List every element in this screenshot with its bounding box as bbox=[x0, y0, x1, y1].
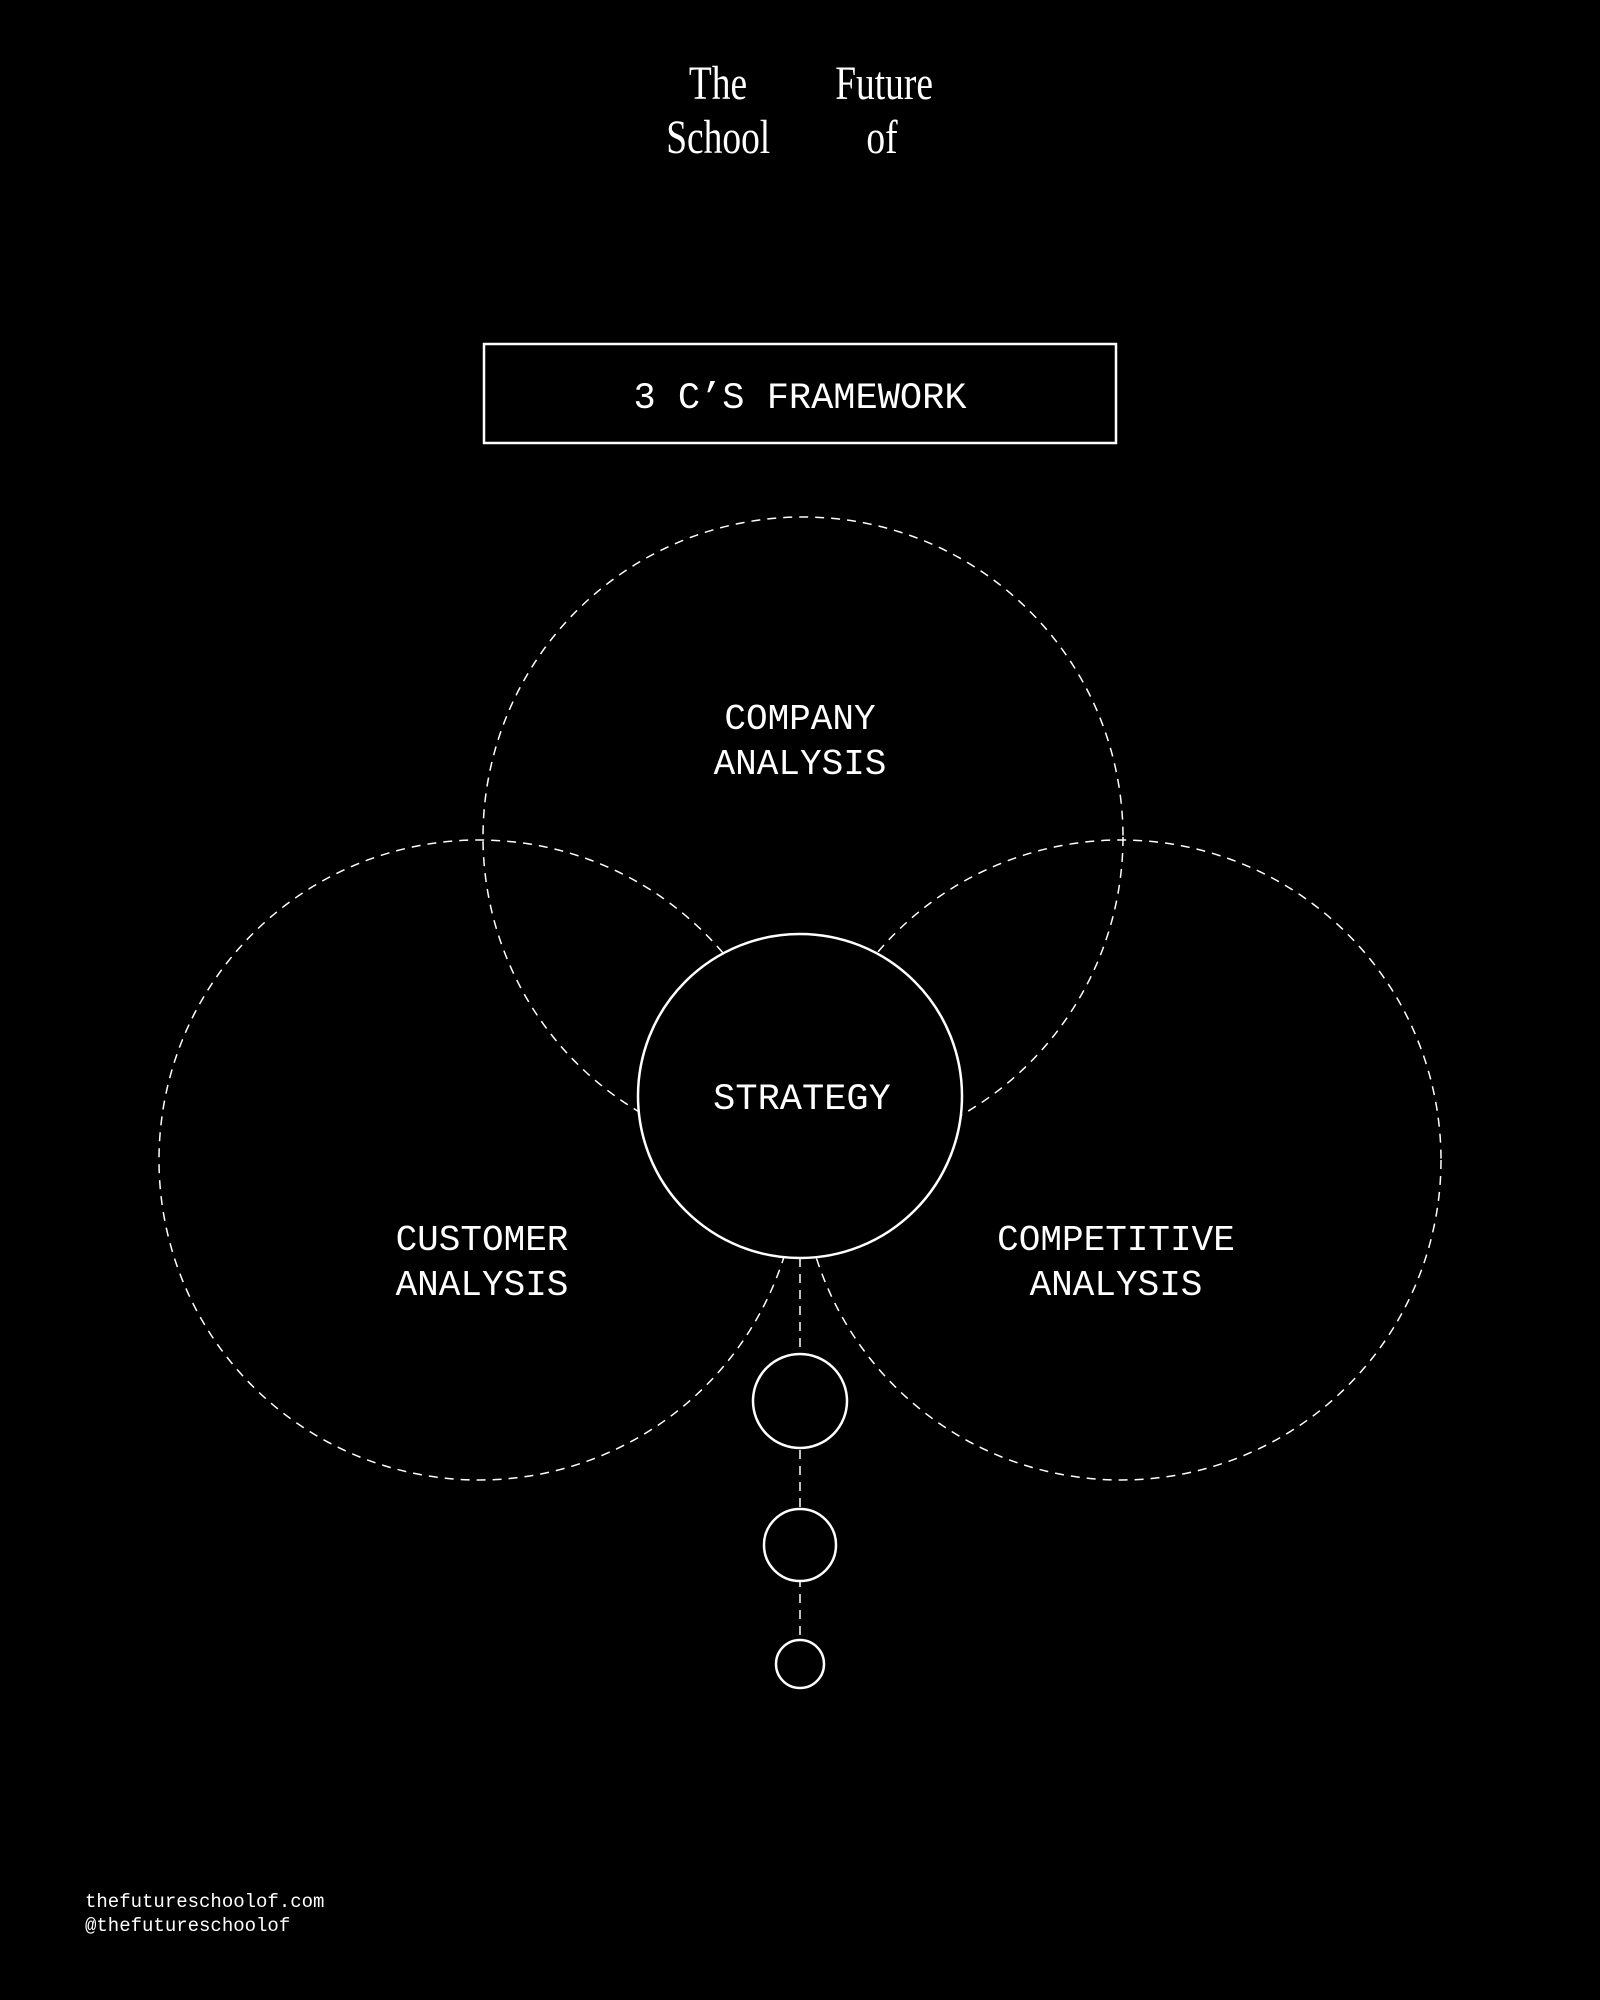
circle: customer bbox=[159, 840, 799, 1480]
logo title: The bbox=[689, 57, 747, 110]
footer bbox=[85, 1891, 324, 1937]
logo title: of bbox=[866, 111, 898, 164]
connector line bbox=[799, 1258, 801, 1640]
strategy circle: STRATEGY bbox=[713, 1079, 891, 1121]
logo title bbox=[666, 57, 933, 164]
strategy circle bbox=[638, 934, 962, 1258]
heading box bbox=[484, 344, 1116, 443]
circle: company bbox=[483, 517, 1123, 1157]
circle: competitive bbox=[801, 840, 1441, 1480]
logo title: Future bbox=[835, 57, 933, 110]
circle: customer: ANALYSIS bbox=[396, 1265, 568, 1306]
footer: thefutureschoolof.com bbox=[85, 1891, 324, 1913]
circle: company: COMPANY bbox=[724, 699, 876, 740]
logo title: School bbox=[666, 111, 770, 164]
circle: customer: CUSTOMER bbox=[396, 1220, 568, 1261]
circle: competitive: ANALYSIS bbox=[1030, 1265, 1202, 1306]
footer: @thefutureschoolof bbox=[85, 1915, 290, 1937]
circle: competitive: COMPETITIVE bbox=[997, 1220, 1235, 1261]
heading box: 3 C’S FRAMEWORK bbox=[633, 378, 967, 420]
circle: company: ANALYSIS bbox=[714, 744, 886, 785]
small circles bbox=[753, 1354, 847, 1688]
